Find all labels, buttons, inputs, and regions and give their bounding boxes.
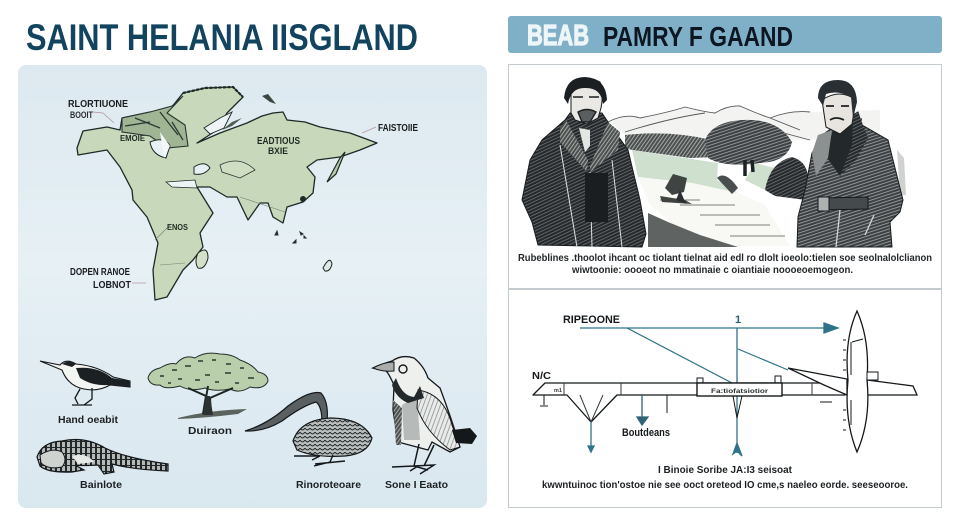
title: SAINT HELANIA IISGLAND — [26, 17, 418, 58]
arrow: down from V — [588, 422, 594, 452]
label: water bird: Rinoroteoare — [296, 479, 361, 491]
icon: long-necked water bird — [245, 393, 372, 466]
diagram label: marker: 1 — [735, 314, 741, 326]
illustration: right figure in belted coat — [797, 80, 903, 247]
illustration: landscape — [608, 106, 906, 247]
map label: east — [362, 123, 418, 134]
icon: lizard — [37, 440, 168, 474]
diagram label: left: N/C — [532, 371, 551, 382]
map label: south: ENOS — [167, 222, 188, 232]
map label: north-west: BOOIT — [70, 110, 93, 120]
caption — [518, 253, 932, 276]
map label: north-west — [68, 98, 128, 123]
label: wading bird: Hand oeabit — [58, 414, 118, 426]
header badge: BEAB — [527, 20, 589, 52]
panel: island map and wildlife — [18, 65, 487, 508]
runway beam: m1 — [554, 388, 562, 394]
leader lines — [627, 328, 788, 383]
runway beam: Fa:tiofatsiotior — [711, 388, 769, 395]
diagram label: bottom: Boutdeans — [622, 427, 670, 439]
arrow: horizontal line — [580, 323, 838, 333]
map of land masses — [77, 87, 377, 300]
map label: central region — [257, 136, 300, 156]
icon: aircraft plan view — [788, 311, 917, 452]
map label: centre-left: EMOIE — [120, 133, 145, 143]
diagram caption: kwwntuinoc tion'ostoe nie see ooct oreteod IO cme,s naeleo eorde. seeseooroe. — [542, 479, 908, 491]
map label: south-west: LOBNOT — [93, 280, 131, 291]
map label: south-west: DOPEN RANOE — [70, 267, 130, 278]
diagram caption — [542, 464, 908, 491]
caption: Rubeblines .thoolot ihcant oc tiolant tielnat aid edl ro dlolt ioeolo:tielen soe seolnalolclianon — [518, 253, 932, 264]
label: tree: Duiraon — [188, 426, 232, 437]
map label: central region: BXIE — [268, 146, 288, 156]
diagram label: top: RIPEOONE — [563, 314, 620, 326]
caption: wiwtoonie: oooeot no mmatinaie c oiantiaie noooeoemogeon. — [571, 265, 853, 276]
map label: north-west: RLORTIUONE — [68, 98, 128, 110]
runway beam — [533, 376, 845, 422]
map label: east: FAISTOIIE — [378, 123, 418, 134]
map label: south-west — [70, 267, 146, 291]
panel: portraits and landscape — [508, 64, 942, 288]
icon: large perching bird — [373, 357, 477, 474]
illustration: left figure in long coat — [522, 77, 646, 247]
panel: aircraft runway diagram — [508, 290, 942, 508]
arrow: vertical line — [733, 328, 742, 456]
icon: flat-topped tree — [148, 353, 268, 419]
diagram caption: I Binoie Soribe JA:I3 seisoat — [658, 464, 792, 476]
header heading: PAMRY F GAAND — [603, 21, 793, 52]
arrow: down to label — [637, 395, 648, 425]
section header bar — [508, 16, 942, 53]
icon: small wading bird — [40, 361, 130, 405]
label: lizard: Bainlote — [80, 479, 122, 491]
map label: central region: EADTIOUS — [257, 136, 300, 147]
label: large bird: Sone I Eaato — [385, 479, 448, 491]
